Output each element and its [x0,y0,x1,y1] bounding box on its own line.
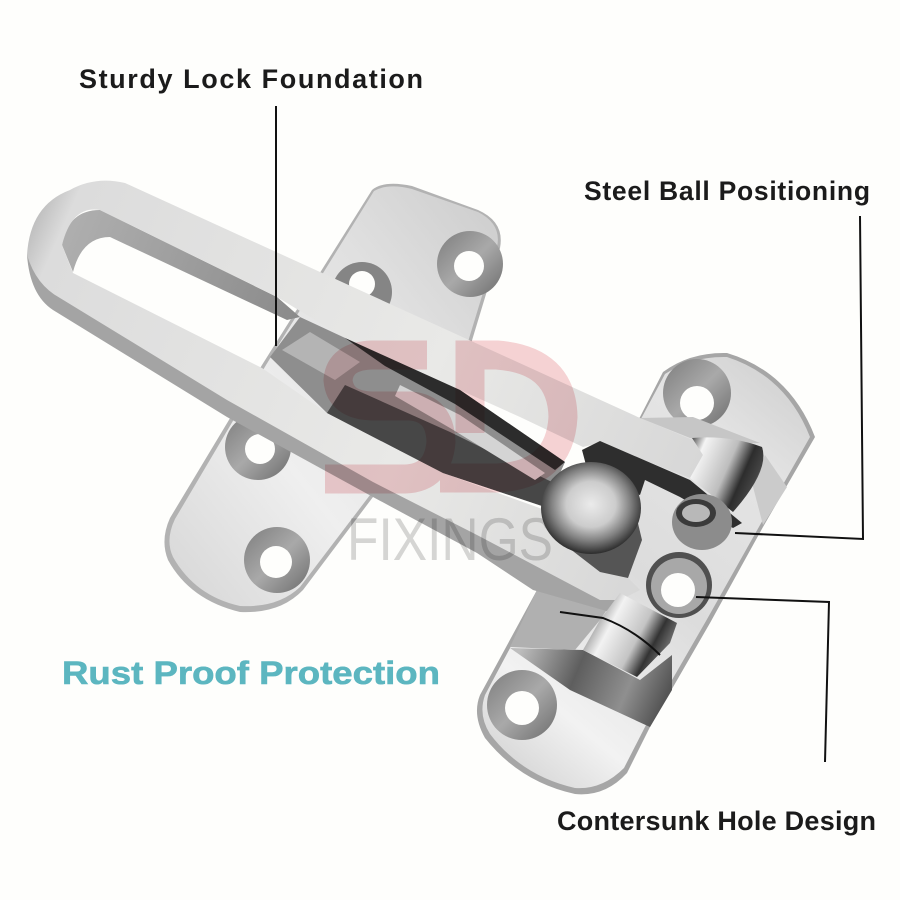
front plate: lower-right mounting plate [477,353,815,794]
block lower dark streak [327,385,558,507]
block left light streak [282,332,360,380]
lock foundation: dark central block [270,317,565,507]
shadow under ball [565,490,642,578]
leader line: Sturdy Lock Foundation [275,106,277,346]
knuckle black groove [560,612,660,655]
sliding hasp: U-shaped arm [27,181,703,612]
screw hole: plate 1 bottom [244,527,310,593]
screw hole: plate 1 top right [437,231,503,297]
watermark S [325,355,441,479]
steel ball [541,462,641,554]
label: Contersunk Hole Design: Contersunk Hole Design [557,806,876,836]
screw hole: countersunk centre [646,552,712,618]
lower arm outer bevel [27,255,625,612]
upper arm inner bevel [62,210,300,320]
block upper dark streak [345,338,565,470]
hinge knuckle: lower [583,593,677,677]
lower wedge shadow [510,590,610,650]
hasp main face [27,181,703,600]
label: Steel Ball Positioning [584,176,870,539]
leader line: Steel Ball Positioning [735,216,863,539]
pivot knuckle: upper [690,437,763,512]
label: Contersunk Hole Design [557,597,876,836]
steel ball positioning ring [672,494,732,550]
screw hole: plate 2 top [663,359,731,427]
watermark D [440,355,563,478]
watermark logo [325,355,563,479]
watermark wordmark: FIXINGS [347,506,553,573]
lower foot bevel [510,648,672,727]
screw hole: plate 2 bottom [487,670,557,740]
leader line: Contersunk Hole Design [696,597,829,762]
plate flap above knuckle [640,417,760,444]
side wedge of knuckle [752,455,787,525]
label: Sturdy Lock Foundation: Sturdy Lock Foundation [79,64,423,94]
block highlight [395,385,545,480]
dark strap behind knuckle [582,441,742,528]
back plate: upper-left mounting plate [164,184,503,612]
label: Rust Proof Protection: Rust Proof Protection [62,655,440,691]
screw hole: plate 1 upper middle [332,262,392,322]
screw hole: plate 1 lower middle [225,414,291,480]
label: Steel Ball Positioning: Steel Ball Positioning [584,176,870,206]
steel ball and pivot hardware [541,417,787,677]
